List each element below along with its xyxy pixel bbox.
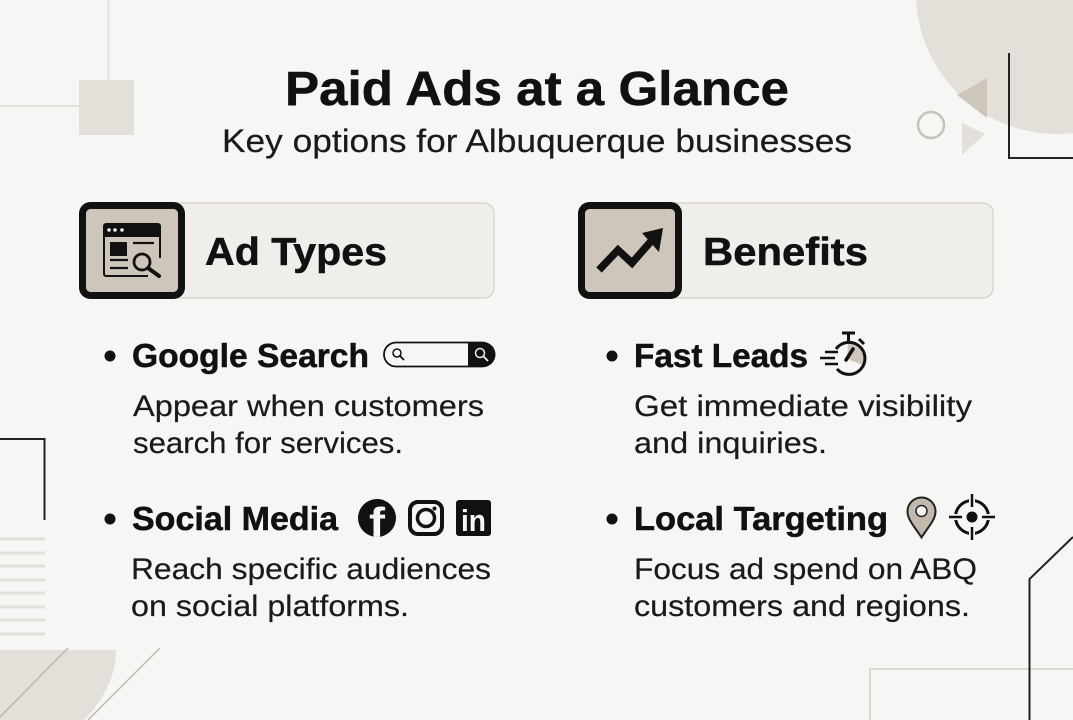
decoration: left bracket and stripes <box>0 439 45 634</box>
icon: browser with magnifier <box>82 206 182 296</box>
list item: fast leads <box>606 333 972 460</box>
list item: google search: search for services. <box>133 427 403 460</box>
heading: benefits: Benefits <box>703 231 868 274</box>
icon: facebook <box>358 499 396 546</box>
decoration: top-right shapes <box>916 0 1073 158</box>
decoration: bottom-left half circle and diagonals <box>0 648 160 720</box>
list item: google search: Appear when customers <box>133 390 484 423</box>
icon: instagram <box>410 502 442 534</box>
icon: stopwatch <box>820 333 865 374</box>
list item: fast leads: Get immediate visibility <box>634 390 972 423</box>
list item: google search <box>104 337 496 460</box>
list item: social media: Reach specific audiences <box>131 553 491 586</box>
list item: local targeting <box>606 494 995 623</box>
list item: local targeting: Local Targeting <box>634 500 888 537</box>
list item: local targeting: Focus ad spend on ABQ <box>634 553 977 586</box>
decoration: bottom-right lines <box>870 537 1073 720</box>
list item: social media <box>104 499 491 623</box>
list item: social media: on social platforms. <box>131 590 409 623</box>
list item: google search: Google Search <box>132 337 369 374</box>
panel: ad types header <box>80 203 494 298</box>
panel: benefits header <box>580 203 993 298</box>
heading: ad types: Ad Types <box>205 231 387 274</box>
list item: fast leads: and inquiries. <box>634 427 827 460</box>
icon: target crosshair <box>949 494 995 540</box>
icon: map pin <box>908 498 936 538</box>
icon: rising arrow <box>582 206 678 296</box>
list item: social media: Social Media <box>132 500 339 537</box>
subtitle: Key options for Albuquerque businesses <box>222 123 852 159</box>
list item: local targeting: customers and regions. <box>634 590 970 623</box>
icon: facebook: f <box>369 499 386 546</box>
list item: fast leads: Fast Leads <box>634 337 808 374</box>
icon: linkedin: in <box>461 503 486 538</box>
title: Paid Ads at a Glance <box>285 63 789 116</box>
icon: search bar <box>384 342 496 367</box>
decoration: top-left square and lines <box>0 0 134 135</box>
